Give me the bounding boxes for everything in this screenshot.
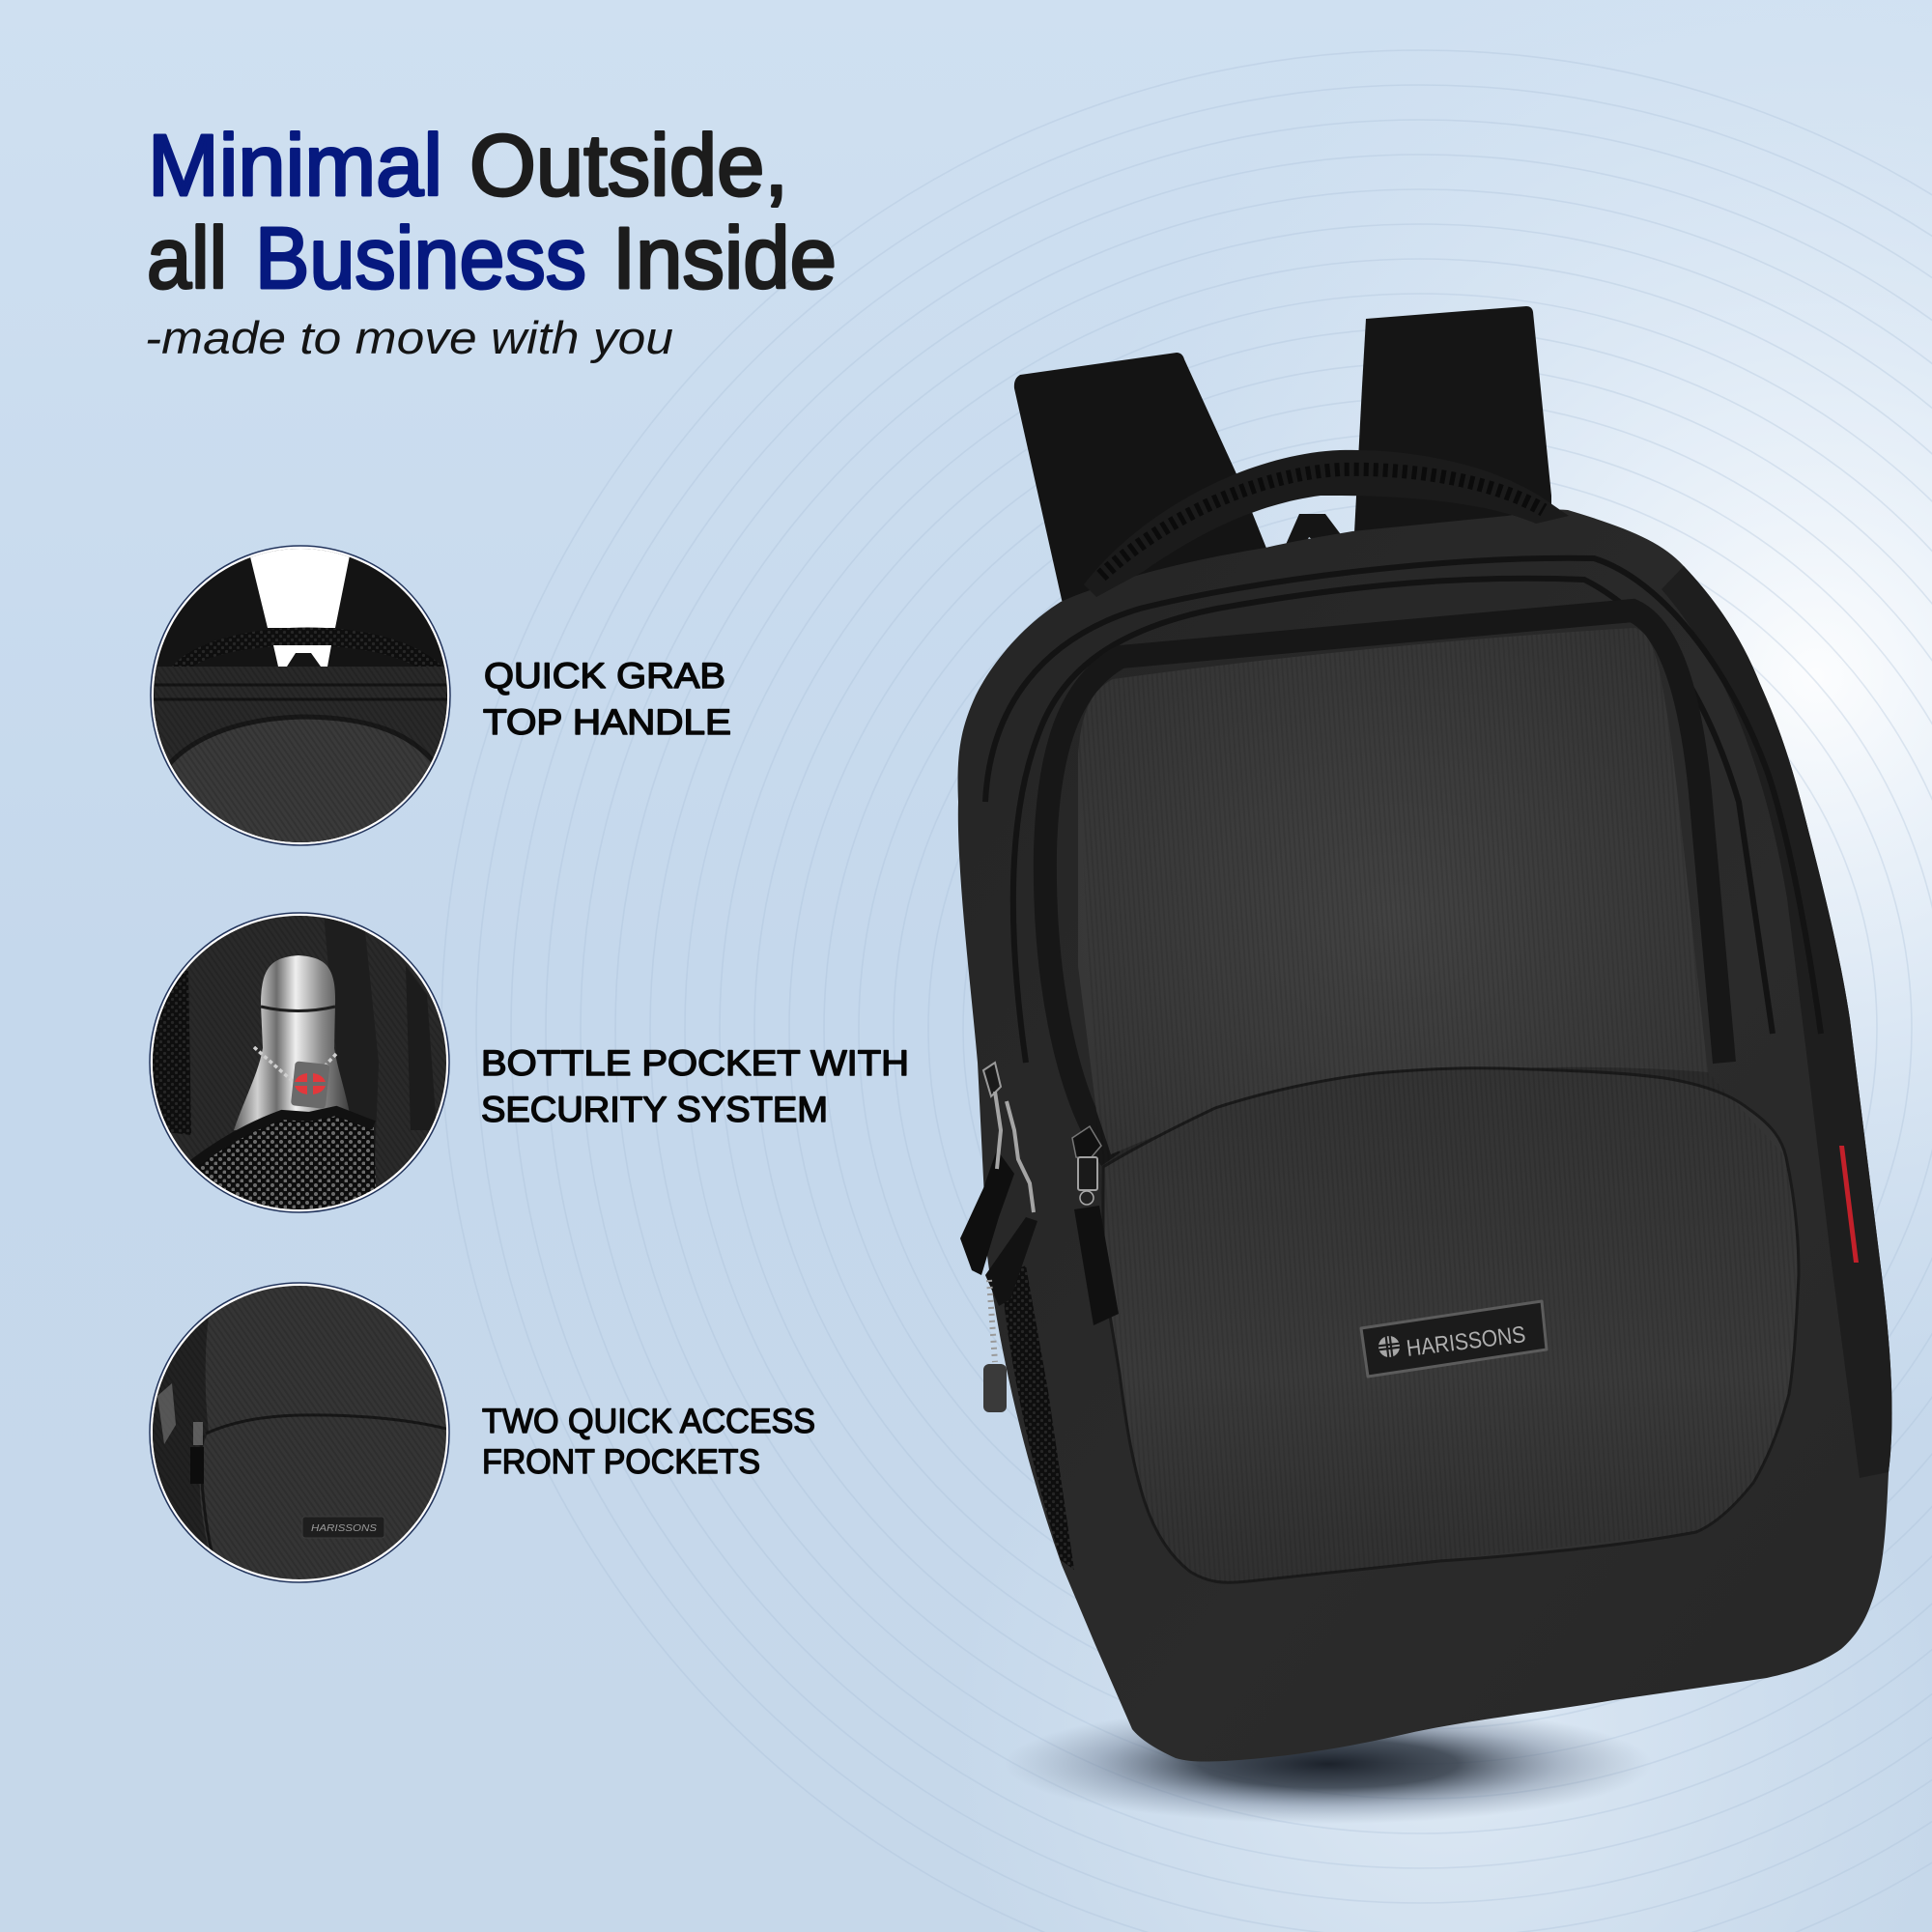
feature label: quick grab [483,656,731,742]
backpack [958,306,1892,1762]
floor shadow [1005,1704,1652,1824]
side edge shading [1662,566,1892,1478]
feature label: quick grab: TOP HANDLE [483,702,731,742]
heading: Minimal [148,118,442,214]
left shoulder strap [1014,353,1267,604]
feature circle: front pockets [150,1283,450,1584]
feature circle: front pockets: HARISSONS [311,1522,377,1534]
main body [958,509,1892,1762]
feature circle: bottle pocket [150,913,450,1212]
feature label: bottle pocket: SECURITY SYSTEM [481,1090,828,1129]
feature label: front pockets [482,1403,815,1481]
front pocket [1103,1068,1799,1582]
feature label: front pockets: FRONT POCKETS [482,1443,760,1481]
feature label: front pockets: TWO QUICK ACCESS [482,1403,815,1440]
zipper pull centre [1072,1126,1119,1325]
subtitle: -made to move with you [145,312,673,363]
fabric ribs [1078,628,1796,1582]
zipper stopper [983,1364,1007,1412]
feature label: bottle pocket: BOTTLE POCKET WITH [481,1043,909,1083]
brand badge [1361,1301,1547,1377]
hanging loop [1285,514,1343,549]
brand badge: HARISSONS [1405,1321,1527,1362]
heading: all [147,211,227,307]
red accent strip [1839,1146,1859,1263]
heading: Inside [612,211,837,307]
feature label: bottle pocket [481,1043,909,1129]
side mesh pocket [1001,1265,1074,1570]
feature label: quick grab: QUICK GRAB [484,656,725,696]
feature circle: top handle [151,541,450,850]
heading: Business [255,211,586,307]
zipper pulls left [960,1063,1037,1412]
top handle [1084,450,1569,597]
heading: Outside, [469,118,788,214]
heading [147,118,837,307]
upper panel [1078,628,1708,1154]
top gusset lines and zipper bands [985,558,1821,1159]
right shoulder strap [1354,306,1551,533]
